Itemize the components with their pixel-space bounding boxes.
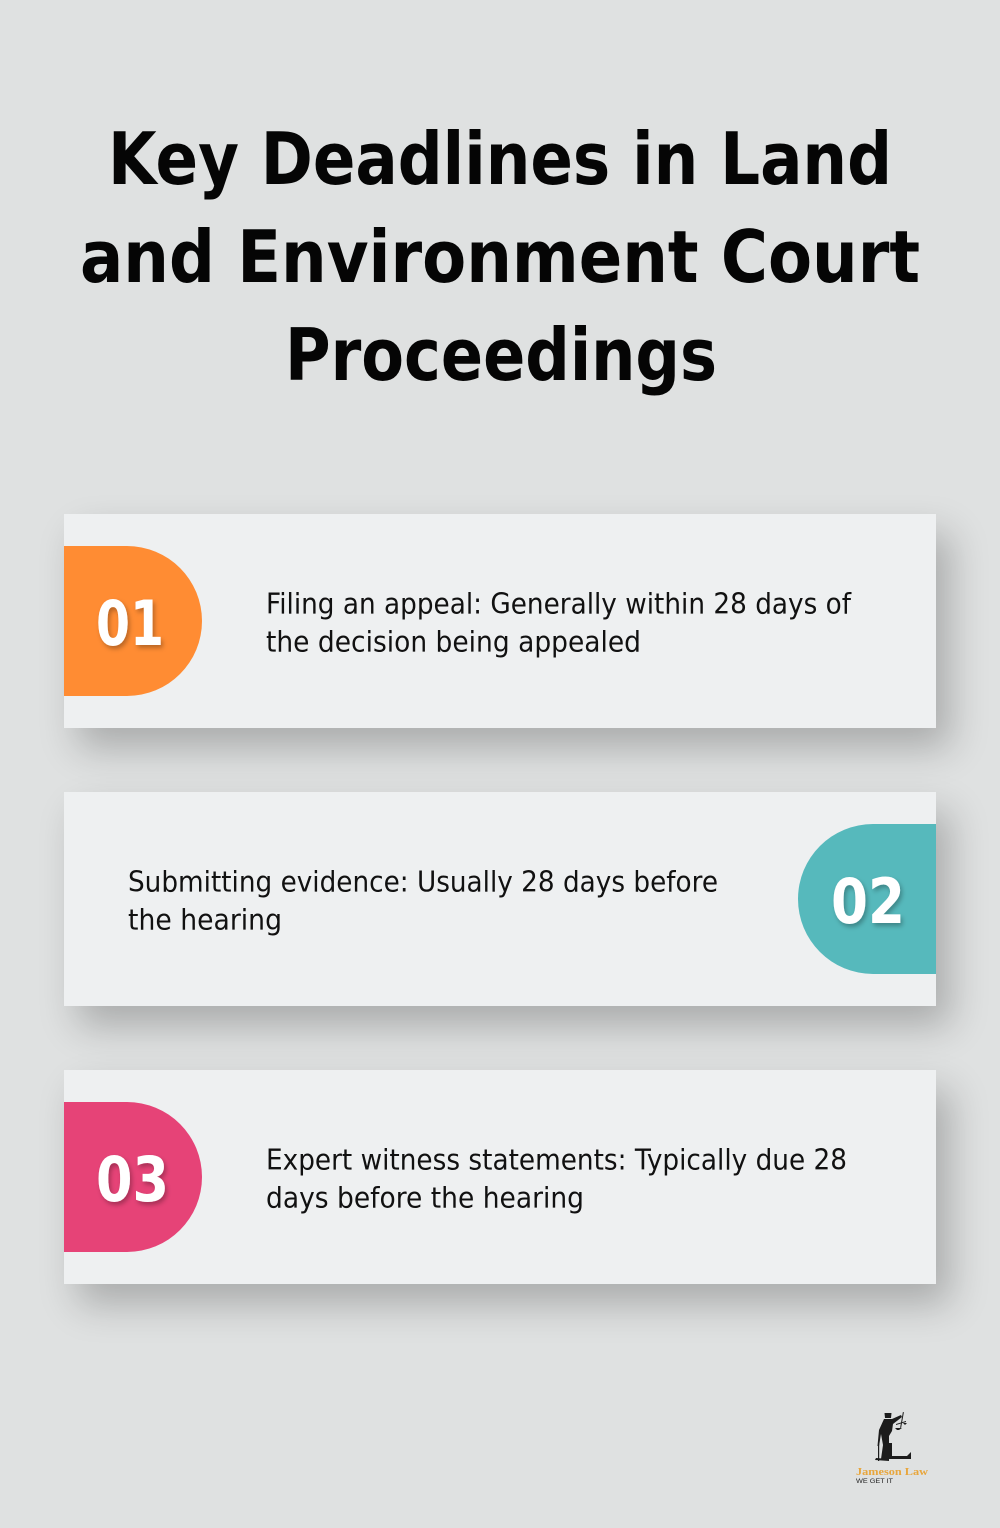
- title: and Environment Court: [80, 215, 920, 299]
- badge 02 shape: [798, 824, 936, 974]
- card 1 background: [64, 514, 936, 728]
- card 1 text: Filing an appeal: Generally within 28 days of: [266, 588, 852, 620]
- badge 03 shape: [64, 1102, 202, 1252]
- card 1 text: [266, 588, 852, 658]
- card 3 text: [266, 1144, 847, 1214]
- card 3 text: Expert witness statements: Typically due 28: [266, 1144, 847, 1176]
- card 3 text: days before the hearing: [266, 1182, 584, 1214]
- number 02: 02: [831, 865, 905, 938]
- title: [80, 117, 920, 397]
- badge 01 shape: [64, 546, 202, 696]
- card 2 background: [64, 792, 936, 1006]
- card 2 text: the hearing: [128, 904, 282, 936]
- logo name: Jameson Law: [856, 1466, 928, 1478]
- card 3 background: [64, 1070, 936, 1284]
- logo: Jameson Law: [856, 1412, 928, 1485]
- card 2 text: [128, 866, 718, 936]
- number 01: 01: [96, 587, 164, 660]
- number 03: 03: [96, 1143, 169, 1216]
- title: Key Deadlines in Land: [108, 117, 892, 201]
- logo tagline: WE GET IT: [856, 1478, 893, 1485]
- card 2 text: Submitting evidence: Usually 28 days before: [128, 866, 718, 898]
- card 1 text: the decision being appealed: [266, 626, 641, 658]
- icon: lady justice with letter L: [875, 1412, 911, 1461]
- title: Proceedings: [285, 313, 717, 397]
